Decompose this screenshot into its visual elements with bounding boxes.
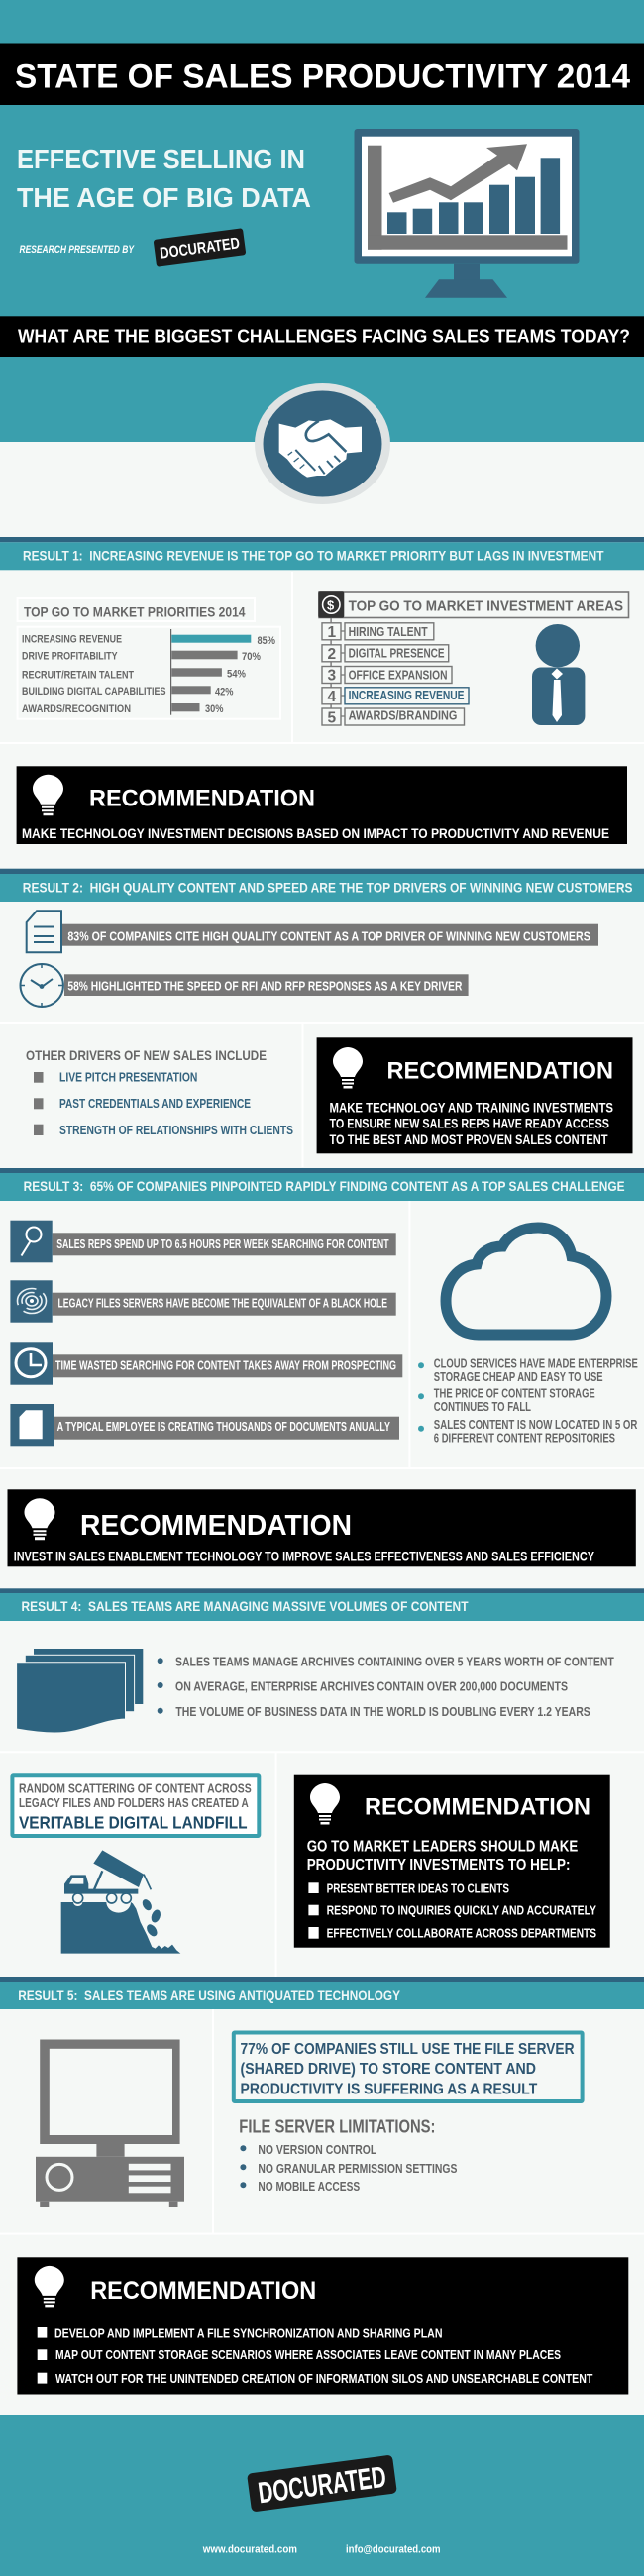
panel: recommendation 4: PRESENT BETTER IDEAS TO CLIENTS: [327, 1880, 509, 1895]
icon: light bulb: [24, 1498, 55, 1540]
icon: light bulb: [333, 1047, 363, 1088]
list: investment areas: 4: [327, 689, 337, 705]
icon: clock: [20, 964, 63, 1007]
icon: handshake badge: [255, 383, 390, 504]
icon: black hole spiral: [10, 1280, 53, 1323]
callout: digital landfill: LEGACY FILES AND FOLDERS HAS CREATED A: [19, 1795, 249, 1810]
list: investment areas: 3: [327, 668, 337, 685]
title bar: STATE OF SALES PRODUCTIVITY 2014: [15, 57, 630, 95]
bar chart: DRIVE PROFITABILITY: [22, 651, 118, 663]
icon: magnifier: [10, 1221, 53, 1262]
icon: cloud: [446, 1228, 606, 1335]
heading: result 2: [0, 869, 644, 902]
callout: digital landfill: [12, 1775, 259, 1836]
callout: digital landfill: RANDOM SCATTERING OF CONTENT ACROSS: [19, 1781, 252, 1796]
bar chart: [18, 627, 280, 719]
bar chart: AWARDS/RECOGNITION: [22, 703, 131, 715]
heading: result 3: [0, 1168, 644, 1201]
stat: black hole: [10, 1280, 396, 1323]
panel: other drivers: LIVE PITCH PRESENTATION: [59, 1070, 197, 1085]
icon: light bulb: [33, 775, 63, 815]
panel: other drivers: [26, 1047, 293, 1137]
panel: recommendation 2: RECOMMENDATION: [386, 1057, 613, 1084]
email: info@docurated.com: [346, 2544, 441, 2556]
icon: desktop computer: [36, 2039, 184, 2207]
list: cloud storage facts: [418, 1356, 638, 1446]
subtitle: THE AGE OF BIG DATA: [17, 182, 311, 213]
stat: high quality content: [27, 911, 598, 952]
question bar: [0, 316, 644, 357]
icon: stacked documents: [17, 1649, 143, 1733]
list: content volume facts: [158, 1654, 614, 1719]
stat: rfi response speed: 58% HIGHLIGHTED THE SPEED OF RFI AND RFP RESPONSES AS A KEY DRIVER: [67, 978, 463, 993]
callout: file server stat: PRODUCTIVITY IS SUFFERING AS A RESULT: [240, 2081, 537, 2097]
website: www.docurated.com: [202, 2544, 297, 2556]
panel: recommendation 1: [17, 766, 627, 844]
stat: time wasted: [10, 1342, 402, 1385]
bar chart: BUILDING DIGITAL CAPABILITIES: [22, 686, 166, 698]
icon: business person: [532, 624, 585, 725]
stat: thousands of documents: [10, 1404, 399, 1446]
list: investment areas: INCREASING REVENUE: [349, 688, 465, 702]
logo: docurated: DOCURATED: [257, 2461, 388, 2510]
panel: recommendation 4: RECOMMENDATION: [365, 1794, 590, 1821]
stat: rfi response speed: [20, 964, 469, 1007]
callout: file server stat: [234, 2033, 583, 2101]
subtitle: [17, 144, 311, 213]
panel: recommendation 5: RECOMMENDATION: [90, 2277, 316, 2305]
panel: recommendation 5: [17, 2257, 628, 2394]
bar chart: 42%: [215, 686, 234, 698]
icon: dollar coin: [318, 591, 344, 618]
list: content volume facts: ON AVERAGE, ENTERPRISE ARCHIVES CONTAIN OVER 200,000 DOCUMENTS: [175, 1679, 568, 1694]
stat: thousands of documents: A TYPICAL EMPLOYEE IS CREATING THOUSANDS OF DOCUMENTS ANUALLY: [57, 1420, 390, 1434]
icon: document: [27, 911, 61, 952]
panel: other drivers: PAST CREDENTIALS AND EXPERIENCE: [59, 1096, 251, 1111]
bar chart: INCREASING REVENUE: [22, 633, 122, 645]
bar chart: RECRUIT/RETAIN TALENT: [22, 670, 134, 682]
icon: light bulb: [310, 1783, 340, 1825]
heading: result 4: RESULT 4: SALES TEAMS ARE MANAGING MASSIVE VOLUMES OF CONTENT: [22, 1598, 469, 1614]
research credit: RESEARCH PRESENTED BY: [20, 244, 135, 256]
list: investment areas: [322, 623, 469, 726]
list: file server limitations: NO VERSION CONTROL: [258, 2142, 376, 2157]
bar chart: 85%: [258, 635, 275, 647]
list: investment areas: AWARDS/BRANDING: [349, 708, 457, 723]
heading: result 5: RESULT 5: SALES TEAMS ARE USING ANTIQUATED TECHNOLOGY: [18, 1987, 401, 2003]
list: file server limitations: NO GRANULAR PERMISSION SETTINGS: [258, 2161, 458, 2176]
panel: recommendation 4: [294, 1775, 610, 1948]
list: investment areas: DIGITAL PRESENCE: [349, 646, 445, 661]
subtitle: EFFECTIVE SELLING IN: [17, 144, 305, 174]
panel: top go to market priorities: [18, 598, 280, 719]
heading: result 5: [0, 1977, 644, 2009]
panel: recommendation 1: RECOMMENDATION: [89, 785, 315, 811]
question bar: WHAT ARE THE BIGGEST CHALLENGES FACING SALES TEAMS TODAY?: [18, 327, 630, 347]
stat: black hole: LEGACY FILES SERVERS HAVE BECOME THE EQUIVALENT OF A BLACK HOLE: [57, 1296, 387, 1310]
icon: monitor with rising chart: [355, 129, 579, 298]
panel: recommendation 5: DEVELOP AND IMPLEMENT A FILE SYNCHRONIZATION AND SHARING PLAN: [54, 2326, 442, 2341]
panel: recommendation 3: RECOMMENDATION: [80, 1510, 352, 1542]
icon: light bulb: [35, 2266, 64, 2307]
panel: recommendation 2: [317, 1037, 632, 1153]
logo: docurated: [247, 2455, 397, 2512]
list: file server limitations: [239, 2116, 458, 2194]
icon: dump truck on landfill: [61, 1850, 180, 1954]
callout: file server stat: (SHARED DRIVE) TO STORE CONTENT AND: [240, 2061, 536, 2078]
panel: header: [0, 0, 644, 442]
list: file server limitations: NO MOBILE ACCESS: [258, 2179, 360, 2194]
panel: footer: [0, 2415, 644, 2576]
panel: other drivers: STRENGTH OF RELATIONSHIPS WITH CLIENTS: [59, 1123, 293, 1137]
list: investment areas: 2: [327, 646, 336, 663]
panel: recommendation 3: [8, 1489, 636, 1566]
icon: dollar coin: $: [327, 598, 335, 612]
list: investment areas: 1: [327, 624, 337, 641]
list: file server limitations: FILE SERVER LIMITATIONS:: [239, 2116, 436, 2136]
panel: recommendation 4: GO TO MARKET LEADERS SHOULD MAKE: [307, 1838, 578, 1855]
list: investment areas: 5: [327, 709, 337, 726]
stat: time wasted: TIME WASTED SEARCHING FOR CONTENT TAKES AWAY FROM PROSPECTING: [55, 1359, 396, 1373]
title bar: [0, 44, 644, 105]
heading: result 1: [0, 537, 644, 570]
bar chart: 70%: [242, 651, 261, 663]
icon: document: [10, 1404, 54, 1446]
bar chart: 30%: [205, 703, 224, 715]
callout: digital landfill: VERITABLE DIGITAL LANDFILL: [19, 1813, 248, 1833]
stat: searching hours: SALES REPS SPEND UP TO 6.5 HOURS PER WEEK SEARCHING FOR CONTENT: [56, 1237, 389, 1251]
bar chart: 54%: [227, 668, 246, 680]
heading: result 4: [0, 1588, 644, 1621]
list: investment areas: OFFICE EXPANSION: [349, 667, 448, 682]
callout: file server stat: 77% OF COMPANIES STILL USE THE FILE SERVER: [240, 2041, 575, 2058]
panel: recommendation 4: PRODUCTIVITY INVESTMENTS TO HELP:: [307, 1857, 571, 1874]
list: investment areas: HIRING TALENT: [349, 624, 428, 639]
panel: top go to market investment areas: [318, 591, 628, 726]
icon: clock: [10, 1342, 53, 1385]
stat: searching hours: [10, 1221, 396, 1262]
panel: top go to market priorities: TOP GO TO MARKET PRIORITIES 2014: [24, 604, 246, 619]
logo: docurated: DOCURATED: [159, 235, 241, 263]
panel: other drivers: OTHER DRIVERS OF NEW SALES INCLUDE: [26, 1047, 267, 1063]
list: cloud storage facts: CONTINUES TO FALL: [434, 1399, 531, 1414]
logo: docurated: [154, 228, 246, 267]
